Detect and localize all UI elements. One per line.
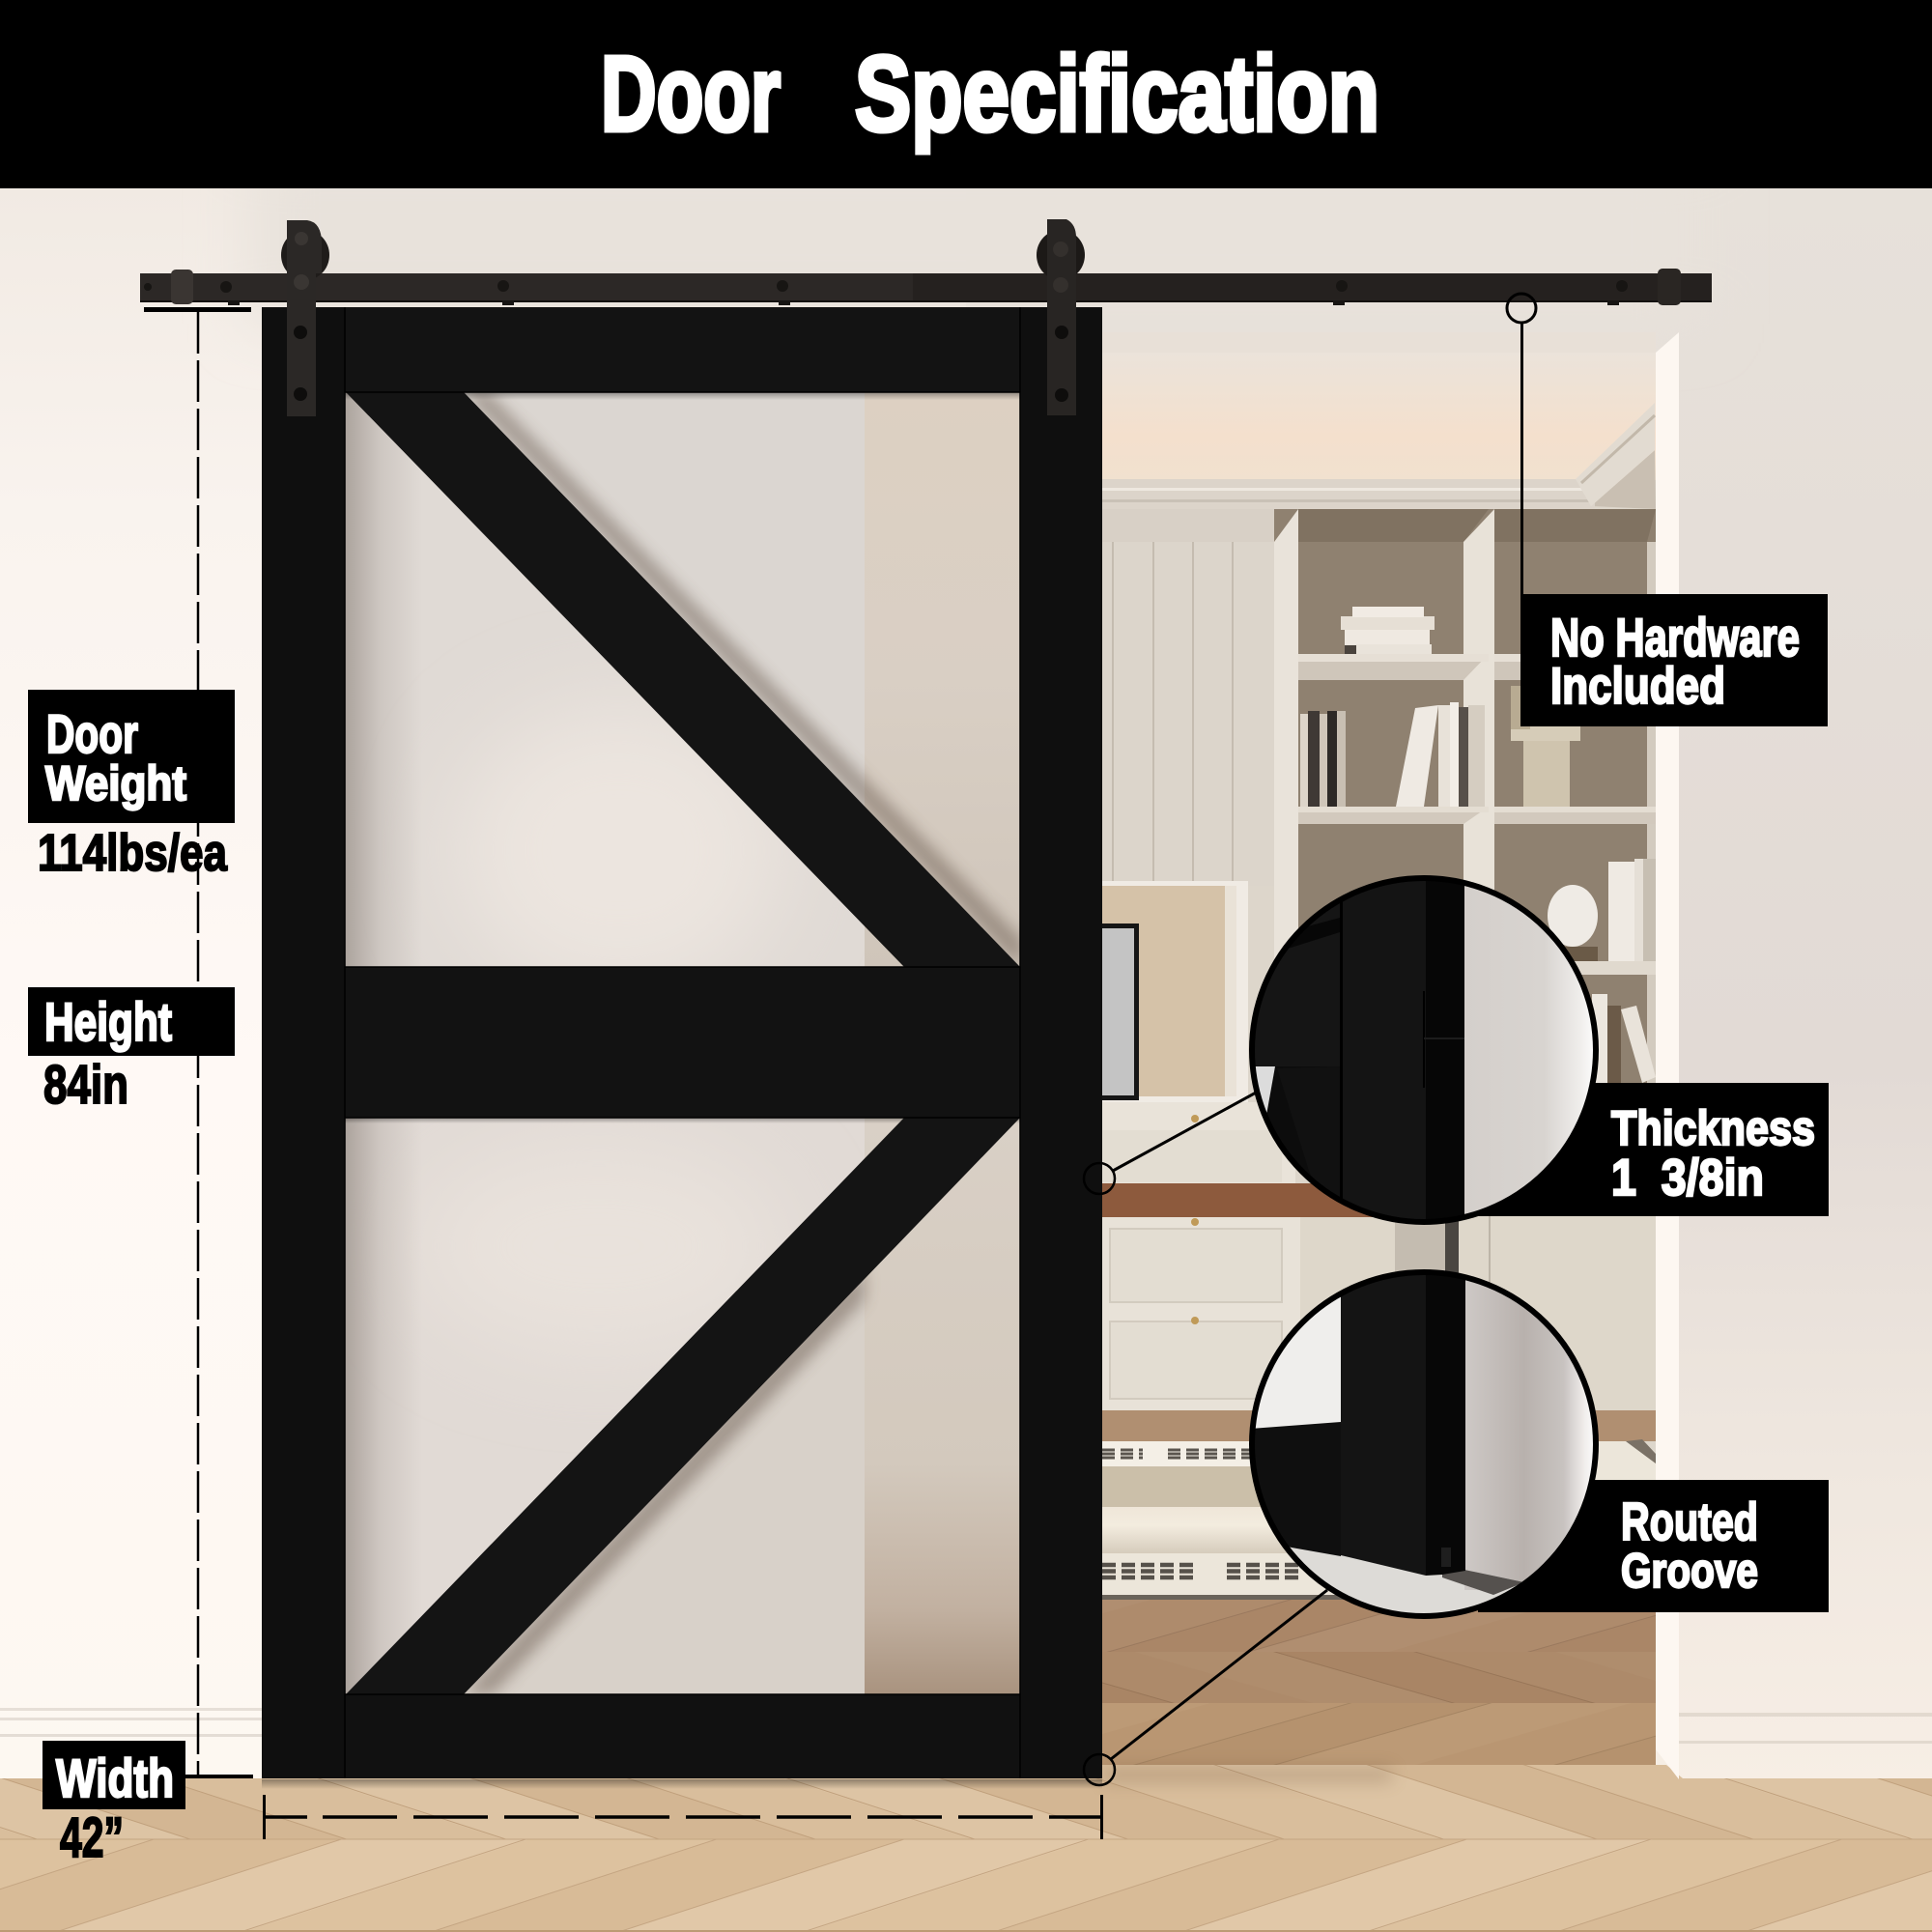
callout: door weight: Door xyxy=(46,703,138,764)
callout: door weight: 114lbs/ea xyxy=(38,824,228,882)
callout: no hardware included xyxy=(1507,294,1828,726)
books and vase on third shelf xyxy=(1548,859,1656,961)
callout: door weight xyxy=(28,690,235,882)
barn door track rail xyxy=(140,269,1712,305)
room seen through the opening xyxy=(1102,332,1656,1765)
callout box: thickness: Thickness xyxy=(1611,1101,1815,1155)
room floor xyxy=(1102,1600,1656,1652)
floor xyxy=(0,1765,1932,1932)
callout: width xyxy=(43,1741,185,1869)
wooden desk top xyxy=(1102,1183,1382,1217)
header banner xyxy=(0,0,1932,188)
door jamb xyxy=(1656,332,1679,1779)
door frame: stiles and rails xyxy=(262,307,1102,1778)
crown molding xyxy=(1102,403,1656,509)
detail lens: routed groove xyxy=(1251,1271,1604,1623)
title: Door xyxy=(601,35,781,154)
wainscot panels xyxy=(1102,509,1274,886)
books on fourth shelf xyxy=(1592,994,1656,1083)
title: Specification xyxy=(855,35,1379,154)
sculpture xyxy=(1511,686,1580,807)
glass panel lower xyxy=(345,1118,1020,1694)
callout box: thickness: 1 3/8in xyxy=(1611,1150,1764,1207)
callout: width: Width xyxy=(56,1747,174,1808)
width dimension line xyxy=(263,1795,1103,1839)
cabinet and drawers xyxy=(1102,1102,1656,1410)
left rail stop xyxy=(171,270,193,304)
callout box: routed groove: Groove xyxy=(1621,1544,1758,1598)
callout box: routed groove: Routed xyxy=(1621,1492,1758,1551)
callout: height: 84in xyxy=(43,1054,128,1116)
framed art xyxy=(1102,881,1248,1105)
callout: no hardware included: No Hardware xyxy=(1550,607,1800,668)
rug and room floor xyxy=(1102,1410,1656,1765)
callout: width: 42” xyxy=(60,1806,124,1869)
callout box: routed groove xyxy=(1478,1480,1829,1612)
book stack xyxy=(1341,607,1435,654)
leader: routed groove marker xyxy=(1084,1590,1327,1785)
detail lens: thickness xyxy=(1251,877,1597,1223)
ceiling xyxy=(1102,332,1656,480)
rug xyxy=(1102,1439,1656,1600)
books on second shelf xyxy=(1300,702,1485,807)
glass panel upper xyxy=(345,392,1024,995)
callout: height xyxy=(28,987,235,1116)
callout: no hardware included: Included xyxy=(1550,658,1725,715)
bookshelf xyxy=(1274,509,1656,1112)
height dimension line xyxy=(144,307,253,1778)
right roller hanger xyxy=(1037,219,1085,415)
barn door xyxy=(262,307,1102,1778)
leader: thickness marker xyxy=(1084,1092,1258,1194)
room wall base xyxy=(1102,332,1656,1607)
callout: height: Height xyxy=(44,991,172,1052)
diagonal braces xyxy=(346,392,1020,1694)
callout box: thickness xyxy=(1478,1083,1829,1216)
left roller hanger xyxy=(281,220,329,416)
right rail stop xyxy=(1658,269,1681,305)
title xyxy=(601,35,1379,154)
callout: door weight: Weight xyxy=(45,756,186,810)
